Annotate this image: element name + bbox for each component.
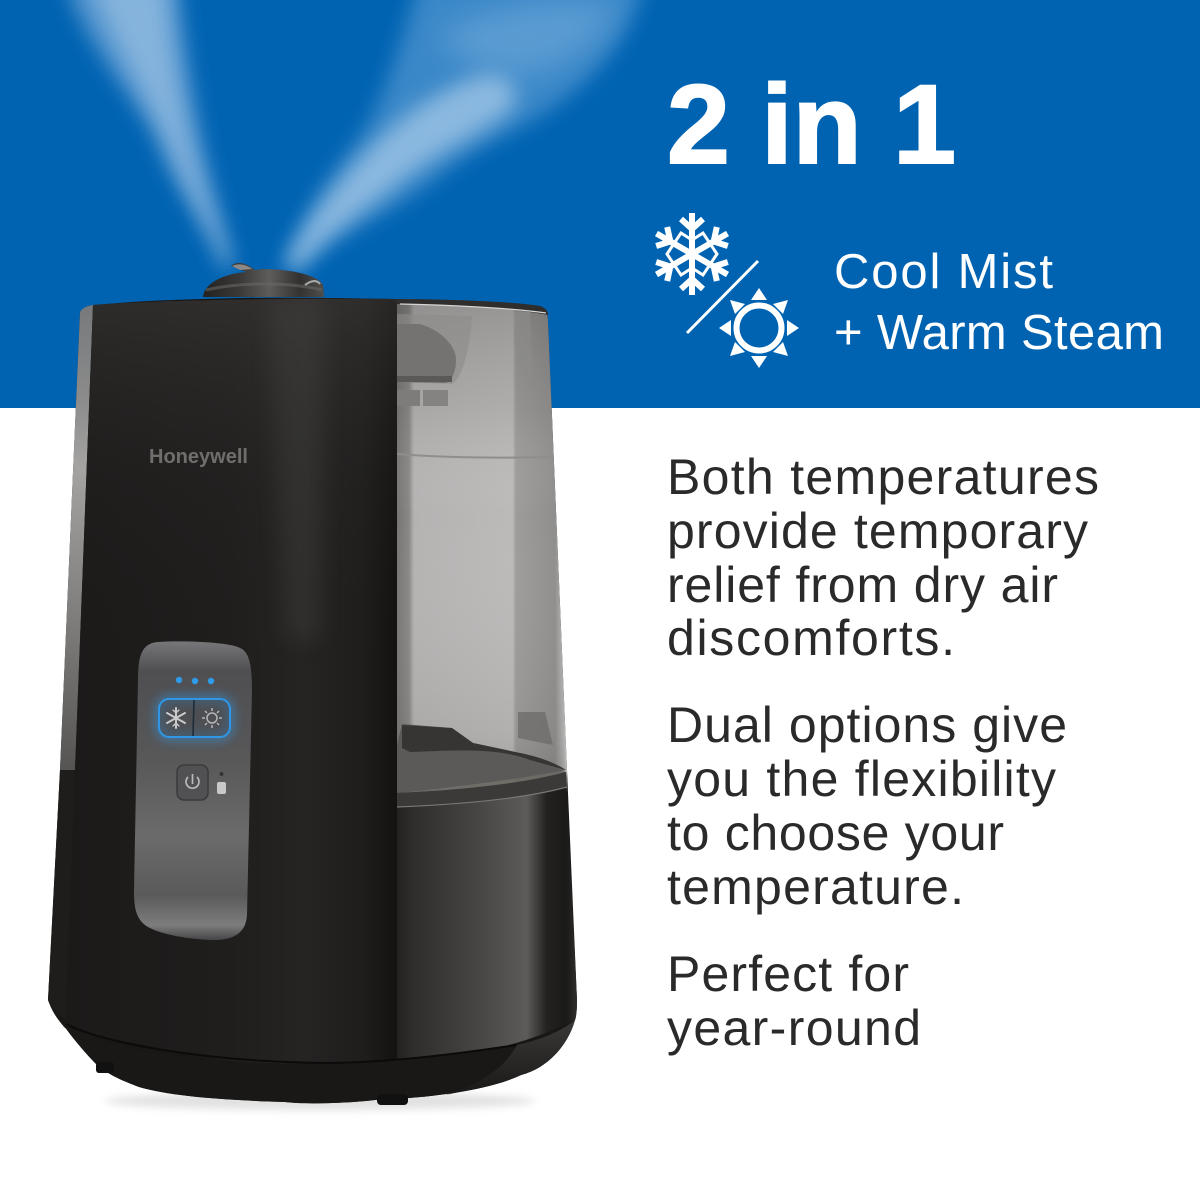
text block: both temperatures: discomforts.: [667, 610, 955, 666]
top cap: [203, 263, 324, 297]
Honeywell logo: Honeywell: [149, 446, 248, 468]
text block: dual options: temperature.: [667, 859, 964, 915]
mode button glow: [159, 699, 230, 737]
title: 2 in 1: [667, 62, 956, 187]
text block: year-round: year-round: [667, 1000, 921, 1056]
text block: dual options: you the flexibility: [667, 751, 1056, 807]
text block: dual options: Dual options give: [667, 697, 1067, 753]
text block: both temperatures: [667, 449, 1099, 666]
mode buttons: [159, 699, 230, 737]
right plume: [284, 0, 645, 270]
tank rim: [393, 299, 548, 315]
icon: small sun button: [202, 708, 222, 728]
feet: [96, 1062, 408, 1105]
left plume: [65, 0, 233, 268]
glossy right base: [445, 1020, 575, 1095]
subtitle: Cool Mist: [834, 245, 1053, 299]
subtitle: + Warm Steam: [834, 306, 1164, 360]
text block: both temperatures: relief from dry air: [667, 557, 1058, 613]
text block: both temperatures: provide temporary: [667, 503, 1088, 559]
status indicator: [217, 772, 226, 794]
icon: snowflake: [651, 213, 733, 295]
subtitle: [834, 245, 1164, 360]
humidifier: [48, 263, 577, 1110]
outer silhouette: [48, 298, 577, 1103]
blue header background: [0, 0, 1200, 408]
icon: sun: [719, 288, 799, 368]
text block: year-round: [667, 946, 921, 1056]
steam plumes: [65, 0, 645, 270]
floor shadow: [105, 1092, 535, 1110]
left side sliver: [60, 305, 93, 770]
indicator dots: [176, 677, 214, 684]
power button: [177, 765, 208, 800]
front black body: [65, 299, 397, 1066]
water tank: [393, 299, 567, 810]
tank band lines: [397, 772, 567, 807]
base skirt: [48, 1000, 575, 1103]
text block: year-round: Perfect for: [667, 946, 909, 1002]
tank seam: [397, 454, 551, 458]
text block: both temperatures: Both temperatures: [667, 449, 1099, 505]
control panel: [134, 641, 252, 940]
icon: divider slash: [687, 261, 758, 333]
icon: small snowflake button: [167, 708, 185, 728]
tank inner chamber: [397, 314, 472, 384]
lower right base: [397, 772, 577, 1064]
text block: dual options: to choose your: [667, 805, 1004, 861]
text block: dual options: [667, 697, 1067, 915]
base seam line: [66, 1024, 517, 1063]
tank floor area: [397, 749, 567, 795]
body vertical sheen: [268, 300, 325, 640]
